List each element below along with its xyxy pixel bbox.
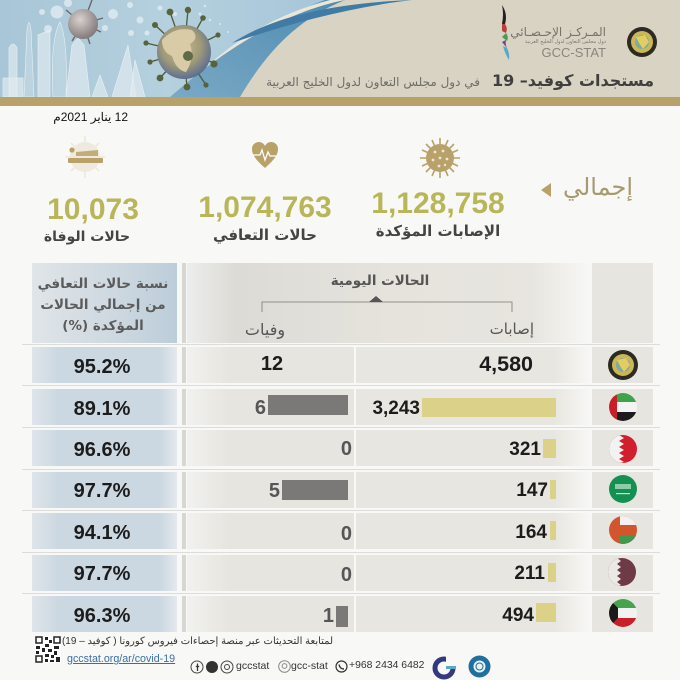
table header: recovery rate: [32, 263, 177, 343]
cases cell: [356, 389, 592, 425]
flag cell: [592, 347, 653, 383]
footer: [35, 636, 490, 680]
KPI: deaths: [44, 193, 139, 245]
recovery cell: [32, 389, 177, 425]
cases cell: [356, 596, 592, 632]
cases cell: [356, 472, 592, 508]
cases cell: 494: [502, 605, 534, 626]
icon: Saudi flag: [609, 475, 637, 503]
row: Bahrain: [32, 430, 653, 466]
recovery cell: [32, 513, 177, 549]
recovery cell: 95.2%: [74, 356, 130, 378]
logo text: GCC-STAT: GCC-STAT: [541, 45, 606, 60]
recovery cell: 96.6%: [74, 439, 130, 461]
deaths cell: [187, 596, 354, 632]
deaths cell: 0: [341, 523, 352, 545]
footer note: لمتابعة التحديثات عبر منصة إحصاءات فيروس كورونا ( كوفيد – 19): [62, 636, 333, 647]
icon: heart: [252, 142, 278, 168]
gold stripe: [0, 97, 680, 106]
icon: Oman flag: [609, 516, 637, 544]
recovery cell: 96.3%: [74, 605, 130, 627]
link: gccstat.org/ar/covid-19: [67, 653, 175, 665]
title: مستجدات كوفيد– 19: [492, 71, 654, 90]
skyline: [3, 22, 145, 97]
flag cell: [592, 596, 653, 632]
recovery rate heading: نسبة حالات التعافي من إجمالي الحالات المؤكدة (%): [38, 276, 168, 334]
sky panel: [0, 0, 335, 97]
recovery cell: 97.7%: [74, 563, 130, 585]
icon: patient in bed: [65, 136, 105, 178]
cases cell: 3,243: [372, 398, 420, 419]
deaths cell: 0: [341, 438, 352, 460]
icon: Bahrain flag: [609, 435, 637, 463]
icon: Kuwait flag: [609, 599, 637, 627]
daily cases heading: الحالات اليومية: [331, 273, 429, 289]
cases cell: 164: [515, 522, 547, 543]
recovered value: 1,074,763: [198, 191, 332, 224]
cases cell: [356, 555, 592, 591]
social icons: [190, 660, 234, 674]
row: Qatar: [32, 555, 653, 591]
row: UAE: [32, 389, 653, 425]
recovered label: حالات التعافي: [213, 226, 317, 244]
cases cell: [356, 513, 592, 549]
flag cell: [592, 555, 653, 591]
recovery cell: 89.1%: [74, 398, 130, 420]
deaths cell: 0: [341, 564, 352, 586]
deaths cell: [187, 472, 354, 508]
deaths value: 10,073: [47, 193, 139, 226]
cases cell: 147: [516, 480, 548, 501]
deaths cell: 12: [261, 353, 283, 375]
icon: whatsapp: [335, 660, 348, 673]
deaths cell: [187, 347, 354, 383]
icon: at sign: [278, 660, 291, 673]
icon: Qatar flag: [608, 558, 636, 586]
flag cell: [592, 430, 653, 466]
recovery cell: [32, 555, 177, 591]
grey virus: [66, 0, 103, 44]
dots: [39, 0, 229, 36]
flag cell: [592, 389, 653, 425]
icon: TUV logo: [468, 656, 490, 678]
QR code: [35, 636, 61, 663]
deaths heading: وفيات: [245, 320, 285, 339]
recovery cell: [32, 347, 177, 383]
recovery cell: [32, 596, 177, 632]
cases cell: 4,580: [479, 352, 533, 376]
icon: GCC emblem: [608, 350, 638, 380]
cases cell: [356, 430, 592, 466]
icon: GCC emblem: [627, 27, 657, 57]
row: Kuwait: [32, 596, 653, 632]
infections heading: إصابات: [490, 320, 534, 338]
row: GCC: [32, 347, 653, 383]
cases cell: [356, 347, 592, 383]
cases cell: 321: [509, 439, 541, 460]
deaths cell: [187, 513, 354, 549]
KPI label: total: إجمالي: [563, 173, 633, 201]
flag cell: [592, 472, 653, 508]
deaths cell: 6: [255, 397, 266, 419]
recovery cell: [32, 472, 177, 508]
date: 12 يناير 2021م: [53, 110, 128, 124]
deaths cell: [187, 555, 354, 591]
icon: left arrow: [541, 183, 551, 197]
deaths cell: 5: [269, 480, 280, 502]
logo ribbon: [502, 5, 510, 60]
cases cell: 211: [514, 563, 545, 584]
swoosh: [170, 0, 412, 97]
deaths label: حالات الوفاة: [44, 229, 130, 245]
KPI: recovered: [198, 191, 332, 244]
icon: UAE flag: [609, 393, 637, 421]
recovery cell: 97.7%: [74, 480, 130, 502]
confirmed value: 1,128,758: [371, 187, 505, 220]
icon: virus: [420, 138, 460, 178]
deaths cell: [187, 389, 354, 425]
beige ground: [0, 0, 680, 97]
globe virus: [143, 7, 221, 90]
confirmed label: الإصابات المؤكدة: [376, 222, 500, 240]
KPI: confirmed cases: [371, 187, 505, 240]
deaths cell: 1: [323, 605, 334, 627]
website handle: gcc-stat: [291, 660, 328, 672]
row: Oman: [32, 513, 653, 549]
table header: daily cases: [187, 263, 592, 343]
deaths cell: [187, 430, 354, 466]
header banner: [0, 0, 680, 106]
logo text: council line: دول مجلس التعاون لدول الخليج العربية: [525, 39, 606, 45]
social handle: gccstat: [236, 660, 269, 672]
flag cell: [592, 513, 653, 549]
logo text: centre name: المـركـز الإحـصـائي: [510, 25, 606, 39]
row: Saudi Arabia: [32, 472, 653, 508]
subtitle: في دول مجلس التعاون لدول الخليج العربية: [266, 75, 480, 89]
recovery cell: 94.1%: [74, 522, 130, 544]
phone number: +968 2434 6482: [349, 660, 424, 671]
row dividers: [22, 344, 660, 345]
icon: certification logo: [432, 656, 456, 680]
bracket: [262, 296, 512, 312]
recovery cell: [32, 430, 177, 466]
